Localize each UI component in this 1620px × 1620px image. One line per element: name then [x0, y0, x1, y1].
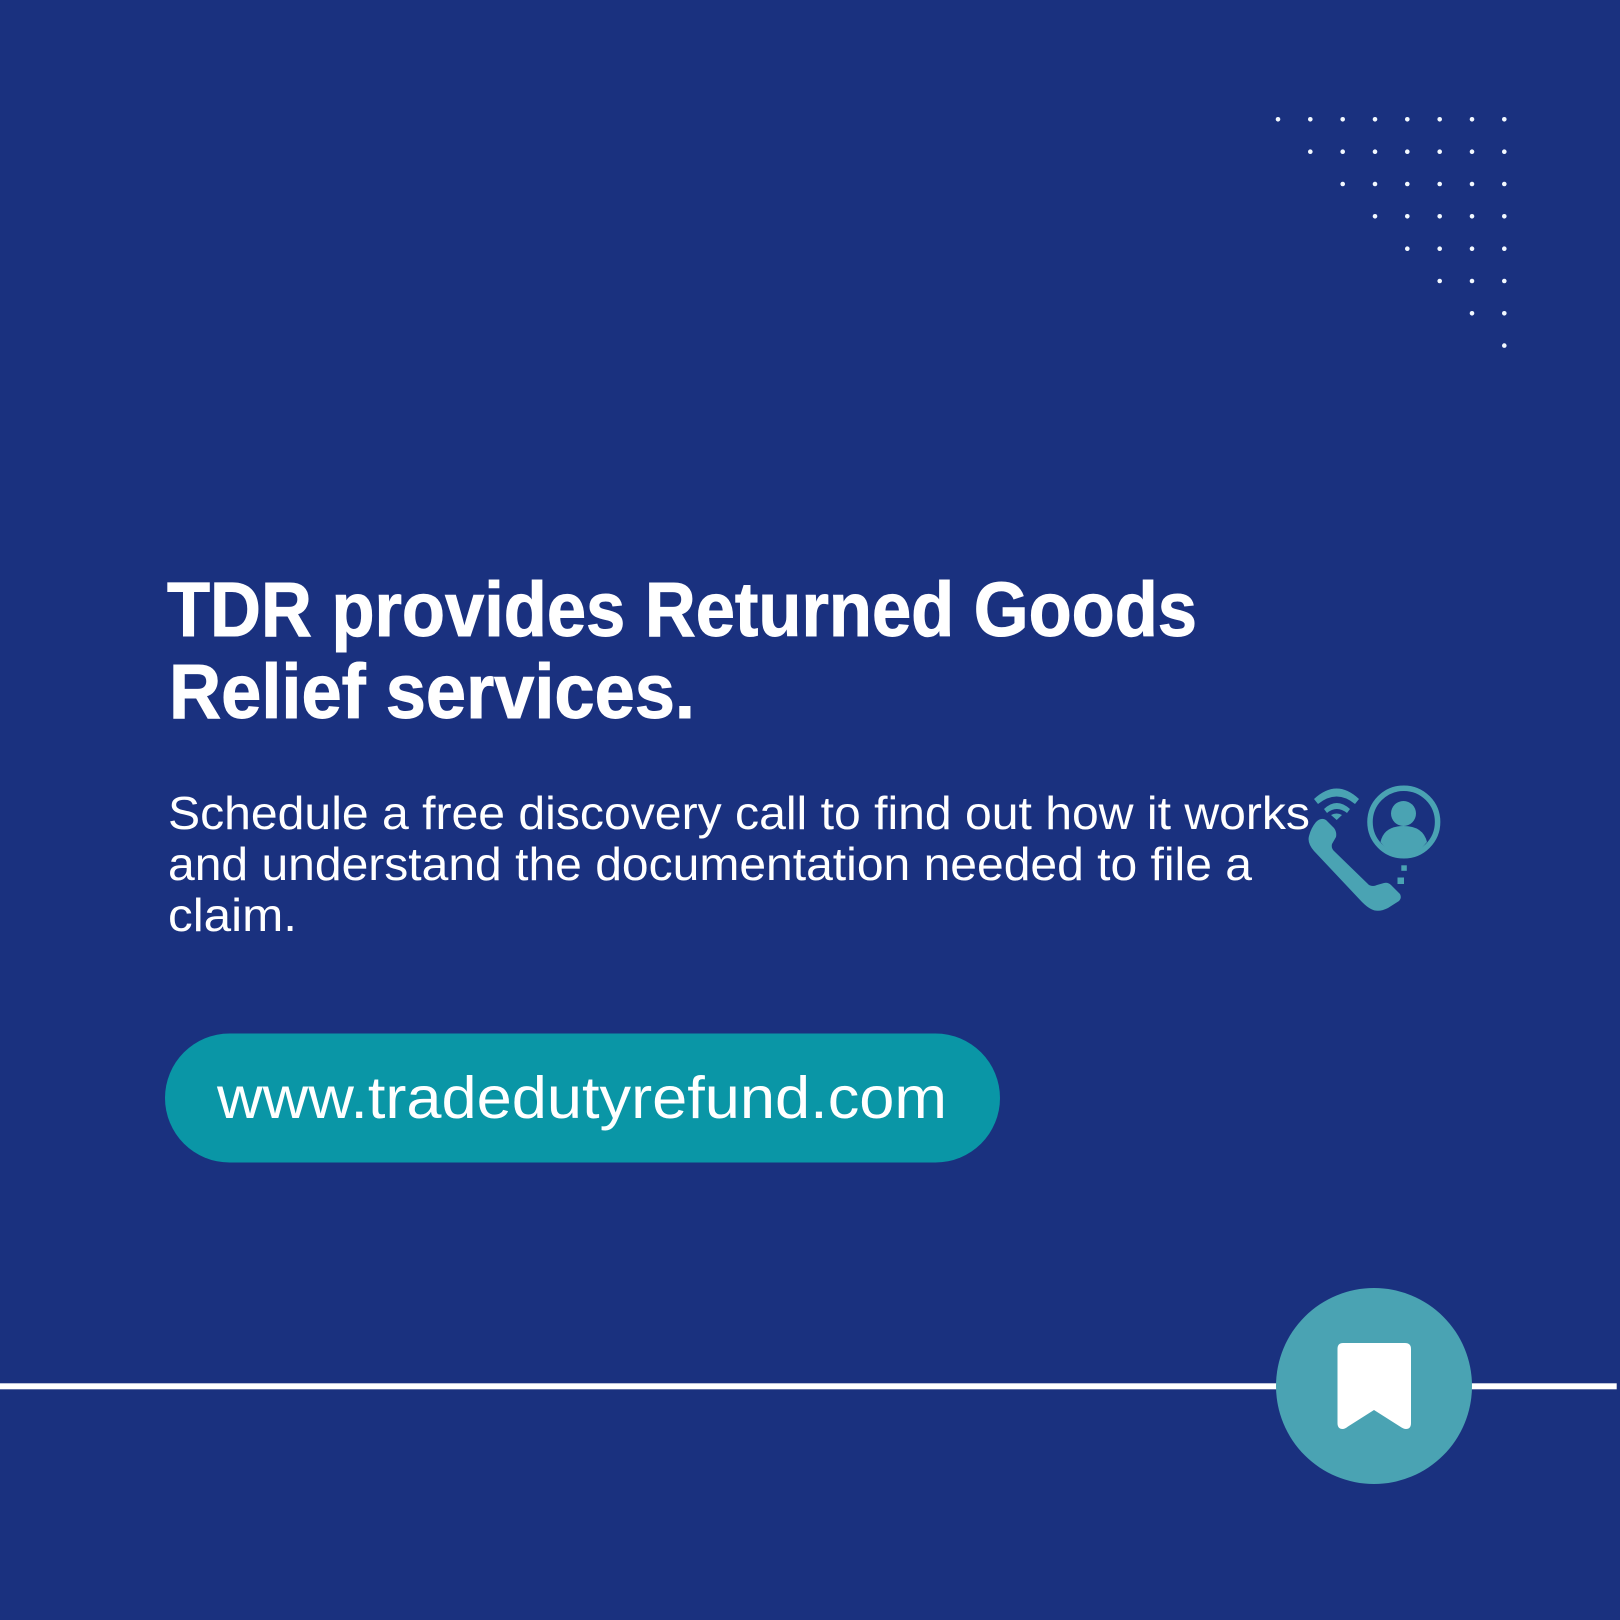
icon: handset	[1309, 819, 1401, 911]
title: TDR provides Returned Goods	[167, 567, 1197, 653]
icon: contact circle	[1370, 788, 1438, 856]
dot grid decoration	[1276, 117, 1507, 348]
icon: connector dots	[1398, 865, 1407, 884]
bookmark badge	[1276, 1288, 1472, 1484]
icon: wifi signal	[1314, 788, 1359, 820]
title: Relief services.	[169, 649, 695, 735]
divider line	[0, 1383, 1617, 1389]
icon: bookmark	[1338, 1343, 1411, 1429]
title	[167, 567, 1197, 735]
url button: www.tradedutyrefund.com	[216, 1065, 947, 1131]
body text: Schedule a free discovery call to find out how it works	[168, 787, 1310, 839]
body text: and understand the documentation needed to file a	[168, 838, 1252, 890]
body text	[168, 787, 1310, 941]
body text: claim.	[168, 889, 297, 941]
icon: phone call with contact	[1309, 788, 1438, 911]
url button	[165, 1034, 1000, 1162]
